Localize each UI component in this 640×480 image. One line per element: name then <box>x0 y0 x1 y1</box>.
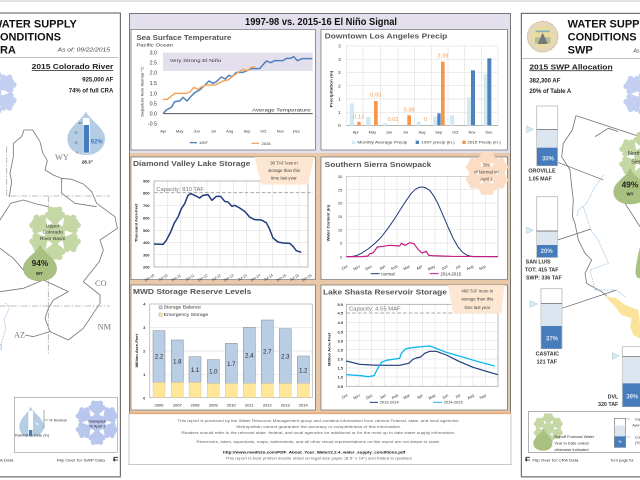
CRA legend: % <box>35 421 39 426</box>
chart: MWD storage reserve levels: 2013 <box>281 402 291 407</box>
CRA legend: % Normal <box>49 418 67 423</box>
Northern Sierra flake and drop: WY <box>627 191 634 196</box>
chart: Diamond Valley Lake storage: 200 <box>143 265 150 270</box>
chart: sea surface temperature: Oct <box>260 129 267 134</box>
tank: San Luis: 20% <box>541 249 553 255</box>
icon: precipitation drop: 30 <box>79 121 82 125</box>
tank: Oroville: 1.05 MAF <box>528 177 552 183</box>
footer disclaimer: Reservoirs, lakes, aqueducts, maps, watersheds, and all other visual representations on this report are not drawn to scale. <box>196 439 440 444</box>
SWP legend: otherwise indicated <box>554 447 588 452</box>
chart: southern Sierra snowpack: 10 <box>338 227 343 232</box>
state labels: WY <box>55 153 69 162</box>
chart: MWD storage reserve levels: Emergency Storage <box>164 312 209 317</box>
chart: Los Angeles precipitation: 2 <box>338 83 341 88</box>
chart: Diamond Valley Lake storage: 300 <box>143 252 150 257</box>
chart: Lake Shasta reservoir storage: Lake Shasta Reservoir Storage <box>323 287 447 296</box>
chart: Los Angeles precipitation: 3 <box>338 57 341 62</box>
river basin map <box>0 130 117 355</box>
callout: DVL storage: 90 TAF less in <box>270 160 298 165</box>
callout: Shasta storage: 468 TAF more in <box>461 288 494 293</box>
chart: sea surface temperature: 1.0 <box>150 91 157 97</box>
callout: DVL storage: storage than this <box>268 168 300 173</box>
allocation figures: 74% of full CRA <box>69 88 114 94</box>
chart: southern Sierra snowpack: Sep <box>478 263 487 271</box>
chart: Los Angeles precipitation: Precipitation (in) <box>328 70 333 107</box>
chart: Los Angeles precipitation: 0 <box>338 123 341 128</box>
chart: Diamond Valley Lake storage: Jul-13 <box>237 273 248 282</box>
chart: Diamond Valley Lake storage: 400 <box>143 240 150 245</box>
chart: Lake Shasta reservoir storage: Oct <box>341 392 349 400</box>
tank: San Luis <box>525 197 562 281</box>
chart: Lake Shasta reservoir storage: Apr <box>416 392 424 400</box>
Upper Colorado flake and drop <box>23 210 79 281</box>
chart: southern Sierra snowpack: 0 <box>340 254 343 259</box>
chart: Lake Shasta reservoir storage: 0.5 <box>337 384 344 389</box>
tank: Oroville <box>527 106 558 183</box>
chart: MWD storage reserve levels: Storage Balance <box>164 305 202 310</box>
chart: Lake Shasta reservoir storage: Jun <box>441 393 449 400</box>
icon: precipitation drop: 10 <box>75 140 78 144</box>
icon: Metropolitan seal <box>527 21 558 52</box>
chart: MWD storage reserve levels: 3 <box>143 325 146 330</box>
icon: precipitation drop <box>67 112 105 165</box>
chart: MWD storage reserve levels: 2010 <box>227 402 237 407</box>
chart: Diamond Valley Lake storage: Jul-14 <box>263 273 274 282</box>
tank: Castaic: CASTAIC <box>536 351 559 357</box>
chart: sea surface temperature: Pacific Ocean <box>136 42 174 47</box>
chart: southern Sierra snowpack: Mar <box>402 263 411 271</box>
chart: Los Angeles precipitation: Sep <box>435 129 443 134</box>
chart: sea surface temperature: May <box>176 129 183 134</box>
chart: sea surface temperature: Very Strong El Niño <box>170 58 222 64</box>
chart: MWD storage reserve levels <box>131 285 315 410</box>
chart: Los Angeles precipitation: 0.13 <box>353 114 364 120</box>
chart: southern Sierra snowpack: Southern Sierra Snowpack <box>325 160 432 169</box>
chart: MWD storage reserve levels: 2.7 <box>263 350 272 356</box>
chart: Lake Shasta reservoir storage: Jan <box>379 393 387 400</box>
chart: Diamond Valley Lake storage: Jan-13 <box>223 273 234 282</box>
icon: precipitation drop: 0 <box>77 150 79 154</box>
chart: Lake Shasta reservoir storage: Sep <box>479 392 488 400</box>
chart: Lake Shasta reservoir storage: 1.5 <box>337 366 344 371</box>
SWP legend: % <box>618 439 622 444</box>
chart: MWD storage reserve levels: 1.2 <box>299 368 308 374</box>
chart: sea surface temperature: Nov <box>277 129 284 134</box>
chart: MWD storage reserve levels: 2006 <box>155 402 164 407</box>
tank: Oroville: OROVILLE <box>528 168 556 174</box>
chart: Diamond Valley Lake storage: Jul-12 <box>211 273 222 282</box>
chart: Diamond Valley Lake storage: Capacity: 810 TAF <box>156 187 205 193</box>
chart: Lake Shasta reservoir storage: Mar <box>402 392 411 400</box>
callout: DVL storage: time last year <box>271 176 297 181</box>
chart: sea surface temperature: 0.5 <box>150 101 157 107</box>
chart: sea surface temperature: Sep <box>243 129 251 134</box>
chart: Diamond Valley Lake storage: Jan-16 <box>301 273 312 282</box>
chart: southern Sierra snowpack: Aug <box>466 264 474 271</box>
chart: Diamond Valley Lake storage: Jul-15 <box>289 273 300 282</box>
chart: Los Angeles precipitation <box>321 29 507 150</box>
callout: Shasta storage: storage than this <box>461 297 493 302</box>
chart: Diamond Valley Lake storage: Jan-12 <box>197 273 208 282</box>
chart: MWD storage reserve levels: 2.3 <box>281 355 290 361</box>
main heading: 1997-98 vs. 2015-16 El Niño Signal <box>245 16 397 28</box>
chart: Diamond Valley Lake storage: 500 <box>143 228 150 233</box>
callout: Shasta storage <box>448 285 505 313</box>
flip over note <box>0 457 118 463</box>
chart: southern Sierra snowpack <box>321 155 507 280</box>
chart: sea surface temperature: -0.5 <box>148 121 157 127</box>
Upper Colorado flake and drop: River Basin <box>40 236 66 242</box>
tank: San Luis: SAN LUIS <box>526 259 551 265</box>
state labels <box>14 153 112 340</box>
Northern Sierra flake and drop <box>614 135 640 204</box>
chart: MWD storage reserve levels: 2.4 <box>245 354 254 360</box>
chart: Los Angeles precipitation: 2.39 <box>437 53 449 59</box>
chart: Los Angeles precipitation: Apr <box>353 129 359 134</box>
flip over note: Turn page for <box>610 458 634 463</box>
tank: DVL <box>598 347 640 408</box>
chart: sea surface temperature: Dec <box>293 129 300 134</box>
tank: Castaic: 37% <box>546 336 559 342</box>
callout: DVL storage <box>255 157 314 185</box>
allocation figures: 925,000 AF <box>82 77 114 83</box>
chart: Lake Shasta reservoir storage: 2.0 <box>337 357 344 362</box>
chart: southern Sierra snowpack: Jun <box>440 264 448 271</box>
chart: Lake Shasta reservoir storage: 2.5 <box>337 347 344 352</box>
chart: MWD storage reserve levels: 2008 <box>191 402 200 407</box>
chart: Diamond Valley Lake storage: Jul-10 <box>158 273 168 282</box>
chart: MWD storage reserve levels: 2012 <box>263 402 273 407</box>
chart: MWD storage reserve levels: MWD Storage Reserve Levels <box>133 287 251 296</box>
chart: Los Angeles precipitation: 2015 Precip (in.) <box>467 140 501 145</box>
tank: Castaic: 121 TAF <box>537 359 558 365</box>
CRA legend <box>14 397 117 452</box>
chart: Diamond Valley Lake storage: 800 <box>143 190 150 195</box>
chart: Lake Shasta reservoir storage: 2014-2015 <box>444 400 464 405</box>
chart: sea surface temperature: Departure from Normal °C <box>140 67 145 117</box>
chart: MWD storage reserve levels: 2007 <box>173 402 183 407</box>
chart: Diamond Valley Lake storage <box>131 157 315 282</box>
Northern Sierra flake and drop: 49% <box>622 180 639 190</box>
footer disclaimer: This report is best printed double sided on legal size paper (8.5" x 14") and folded in quarters <box>225 455 412 460</box>
chart: Lake Shasta reservoir storage: Million Acre-Feet <box>327 332 332 366</box>
Upper Colorado flake and drop: WY <box>36 271 43 276</box>
chart: Lake Shasta reservoir storage: 5.0 <box>337 302 344 307</box>
chart: southern Sierra snowpack: Apr <box>415 263 424 271</box>
chart: Lake Shasta reservoir storage: 3.0 <box>337 338 344 343</box>
chart: Los Angeles precipitation: Nov <box>468 129 476 134</box>
chart: Los Angeles precipitation: Downtown Los Angeles Precip <box>325 31 448 40</box>
chart: southern Sierra snowpack: 30 <box>338 174 343 179</box>
Upper Colorado flake and drop: 94% <box>32 258 49 268</box>
panel: El Nino signal <box>129 14 511 465</box>
chart: Los Angeles precipitation: Jul <box>403 129 408 134</box>
chart: MWD storage reserve levels: 2011 <box>245 402 254 407</box>
chart: Lake Shasta reservoir storage: Dec <box>365 393 373 400</box>
chart: Los Angeles precipitation: Aug <box>418 129 426 134</box>
chart: Diamond Valley Lake storage: 700 <box>143 203 150 208</box>
chart: Los Angeles precipitation: Oct <box>452 129 459 134</box>
chart: MWD storage reserve levels: 2009 <box>209 402 219 407</box>
callout: snowpack flake: of Normal on <box>474 170 499 175</box>
chart: Lake Shasta reservoir storage: Capacity: 4.55 MAF <box>349 307 401 313</box>
chart: Los Angeles precipitation: 1 <box>338 97 341 102</box>
tank: Oroville: 30% <box>542 156 555 162</box>
flip over note <box>525 457 634 463</box>
chart: Diamond Valley Lake storage: Jan-15 <box>275 273 287 282</box>
SWP title: CONDITIONS <box>568 32 637 44</box>
chart: Los Angeles precipitation: 0.38 <box>403 107 415 113</box>
chart: Los Angeles precipitation: 1 <box>338 110 341 115</box>
chart: Diamond Valley Lake storage: 900 <box>143 178 150 183</box>
flip over note: Flip Over for SWP Data <box>57 458 106 463</box>
icon: lavender snowflake <box>0 70 15 116</box>
chart: Los Angeles precipitation: 1997 precip (in.) <box>421 140 455 145</box>
chart: Diamond Valley Lake storage: Jan-14 <box>249 273 261 282</box>
callout: snowpack flake <box>468 155 506 192</box>
chart: MWD storage reserve levels: 2.2 <box>155 355 164 361</box>
chart: Diamond Valley Lake storage: Thousand Acre-Feet <box>134 203 138 242</box>
chart: Lake Shasta reservoir storage: 2013-2014 <box>380 400 400 405</box>
California map <box>558 116 640 340</box>
CRA legend: Rainfall to Date (in) <box>15 433 50 438</box>
state labels: CO <box>95 279 107 288</box>
chart: Diamond Valley Lake storage: Jan-10 <box>143 273 155 282</box>
Upper Colorado flake and drop: Upper <box>46 223 60 229</box>
as-of date: As of: 09/22/2015 <box>56 48 110 54</box>
chart: MWD storage reserve levels: 1.7 <box>227 362 236 368</box>
chart: sea surface temperature: Sea Surface Temperature <box>136 33 231 42</box>
icon: precipitation drop: 28.3" <box>82 160 93 165</box>
chart: sea surface temperature: 1.5 <box>150 81 157 87</box>
footer disclaimer: This report is produced by the Water Resource Management group and contains information from various Federal, state, and local agencies. <box>177 418 460 423</box>
panel: SWP water supply conditions <box>521 13 640 478</box>
chart: Los Angeles precipitation: 0.93 <box>370 93 381 99</box>
chart: sea surface temperature: Apr <box>160 129 167 134</box>
chart: MWD storage reserve levels: Million Acre-Feet <box>135 333 139 367</box>
chart: MWD storage reserve levels: 1.0 <box>209 370 218 376</box>
chart: sea surface temperature: 1997 <box>199 140 209 145</box>
chart: southern Sierra snowpack: Feb <box>390 263 399 271</box>
callout: snowpack flake: 5% <box>483 163 490 168</box>
chart: sea surface temperature: 3.0 <box>150 51 157 57</box>
chart: Lake Shasta reservoir storage: May <box>427 393 437 401</box>
tank: DVL: 320 TAF <box>598 402 619 408</box>
chart: MWD storage reserve levels: 0 <box>143 395 146 400</box>
tank: San Luis: TOT: 415 TAF <box>525 268 559 274</box>
chart: southern Sierra snowpack: normal <box>381 271 395 276</box>
chart: southern Sierra snowpack: Oct <box>341 263 349 271</box>
SWP legend: Year to Date unless <box>554 440 589 445</box>
chart: MWD storage reserve levels: 2014 <box>299 402 309 407</box>
chart: Lake Shasta reservoir storage: 4.5 <box>337 311 344 316</box>
chart: Diamond Valley Lake storage: 600 <box>143 215 150 220</box>
chart: Lake Shasta reservoir storage: Nov <box>352 393 361 400</box>
SWP legend <box>528 412 640 452</box>
allocation figures: 20% of Table A <box>529 89 572 95</box>
chart: Lake Shasta reservoir storage: 1.0 <box>337 375 344 380</box>
chart: southern Sierra snowpack: 15 <box>338 214 343 219</box>
chart: sea surface temperature <box>131 29 315 150</box>
chart: southern Sierra snowpack: Jan <box>378 264 386 271</box>
chart: Lake Shasta reservoir storage <box>321 285 507 410</box>
icon: precipitation drop: 92% <box>91 139 103 145</box>
footer disclaimer <box>129 413 511 465</box>
chart: southern Sierra snowpack: Dec <box>364 264 373 271</box>
chart: southern Sierra snowpack: 20 <box>338 201 343 206</box>
footer disclaimer: Metropolitan cannot guarantee the accuracy or completeness of this information. <box>236 424 401 429</box>
chart: sea surface temperature: Aug <box>226 129 233 134</box>
chart: southern Sierra snowpack: 25 <box>338 187 343 192</box>
chart: MWD storage reserve levels: 1 <box>143 372 146 377</box>
chart: sea surface temperature: Average Temperature <box>252 108 311 114</box>
chart: Los Angeles precipitation: Monthly Average Precip <box>357 140 408 145</box>
chart: Los Angeles precipitation: Dec <box>485 129 493 134</box>
chart: sea surface temperature: 2015 <box>262 141 271 146</box>
allocation figures: 382,300 AF <box>529 79 561 85</box>
chart: Los Angeles precipitation: 2 <box>338 70 341 75</box>
chart: Lake Shasta reservoir storage: Aug <box>466 393 475 400</box>
SWP title: SWP <box>568 45 593 57</box>
chart: southern Sierra snowpack: Water Content (in) <box>327 204 331 241</box>
chart: MWD storage reserve levels: 1.1 <box>191 368 200 374</box>
chart: sea surface temperature: Jul <box>211 129 216 134</box>
chart: Los Angeles precipitation: 3 <box>338 44 341 49</box>
Colorado River allocation heading: 2015 Colorado River <box>32 62 113 71</box>
chart: southern Sierra snowpack: Nov <box>352 264 361 271</box>
footer disclaimer: Readers should refer to the relevant state, federal, and local agencies for additional or for the most up to date water supply information. <box>181 430 455 435</box>
callout: Shasta storage: time last year <box>464 305 491 310</box>
chart: Lake Shasta reservoir storage: 4.0 <box>337 320 344 325</box>
chart: Diamond Valley Lake storage: Jul-11 <box>185 273 195 282</box>
panel: CRA water supply conditions <box>0 13 121 478</box>
chart: Lake Shasta reservoir storage: 3.5 <box>337 329 344 334</box>
chart: Diamond Valley Lake storage: Diamond Valley Lake Storage <box>133 159 250 168</box>
tank: San Luis: SWP: 336 TAF <box>526 275 562 281</box>
chart: southern Sierra snowpack: 5 <box>340 241 343 246</box>
state labels: AZ <box>14 331 25 340</box>
chart: MWD storage reserve levels: 1.8 <box>173 360 182 366</box>
callout: snowpack flake: April 1 <box>480 176 493 181</box>
chart: Diamond Valley Lake storage: Jan-11 <box>170 273 182 282</box>
SWP allocation heading: 2015 SWP Allocation <box>529 62 613 71</box>
chart: southern Sierra snowpack: Jul <box>454 263 461 270</box>
chart: sea surface temperature: 0.0 <box>150 111 157 117</box>
CRA legend: Snowpack <box>88 419 107 424</box>
chart: MWD storage reserve levels: 4 <box>143 301 146 306</box>
second green drop <box>636 247 640 278</box>
tank: DVL: 39% <box>626 395 639 401</box>
tank: Castaic <box>530 289 562 365</box>
CRA legend: % April 1 <box>89 423 106 428</box>
chart: Los Angeles precipitation: 0.01 <box>387 117 399 123</box>
chart: sea surface temperature: 2.5 <box>150 61 157 67</box>
tank: DVL: DVL <box>608 394 619 400</box>
chart: sea surface temperature: 2.0 <box>150 71 157 77</box>
flip over note: Flip Over for CRA Data <box>532 458 579 463</box>
chart: Los Angeles precipitation: 0 <box>424 117 427 123</box>
SWP legend: Runoff Forecast Water <box>554 434 595 439</box>
chart: Los Angeles precipitation: May <box>369 129 376 134</box>
icon: precipitation drop: 20 <box>75 130 78 134</box>
icon: lavender snowflake <box>625 71 640 117</box>
state labels: NM <box>98 322 112 331</box>
chart: Lake Shasta reservoir storage: Feb <box>391 392 400 400</box>
chart: southern Sierra snowpack: 2014-2015 <box>440 271 462 276</box>
chart: Lake Shasta reservoir storage: Jul <box>454 392 461 399</box>
Upper Colorado flake and drop: Colorado <box>43 229 63 235</box>
chart: MWD storage reserve levels: 2 <box>143 349 146 354</box>
chart: southern Sierra snowpack: May <box>427 264 436 272</box>
chart: Los Angeles precipitation: Jun <box>386 129 392 134</box>
chart: sea surface temperature: Jun <box>193 129 200 134</box>
footer disclaimer: http://www.mwdh2o.com/PDF_About_Your_Water/2.2.4_water_supply_conditions.pdf <box>223 449 406 454</box>
